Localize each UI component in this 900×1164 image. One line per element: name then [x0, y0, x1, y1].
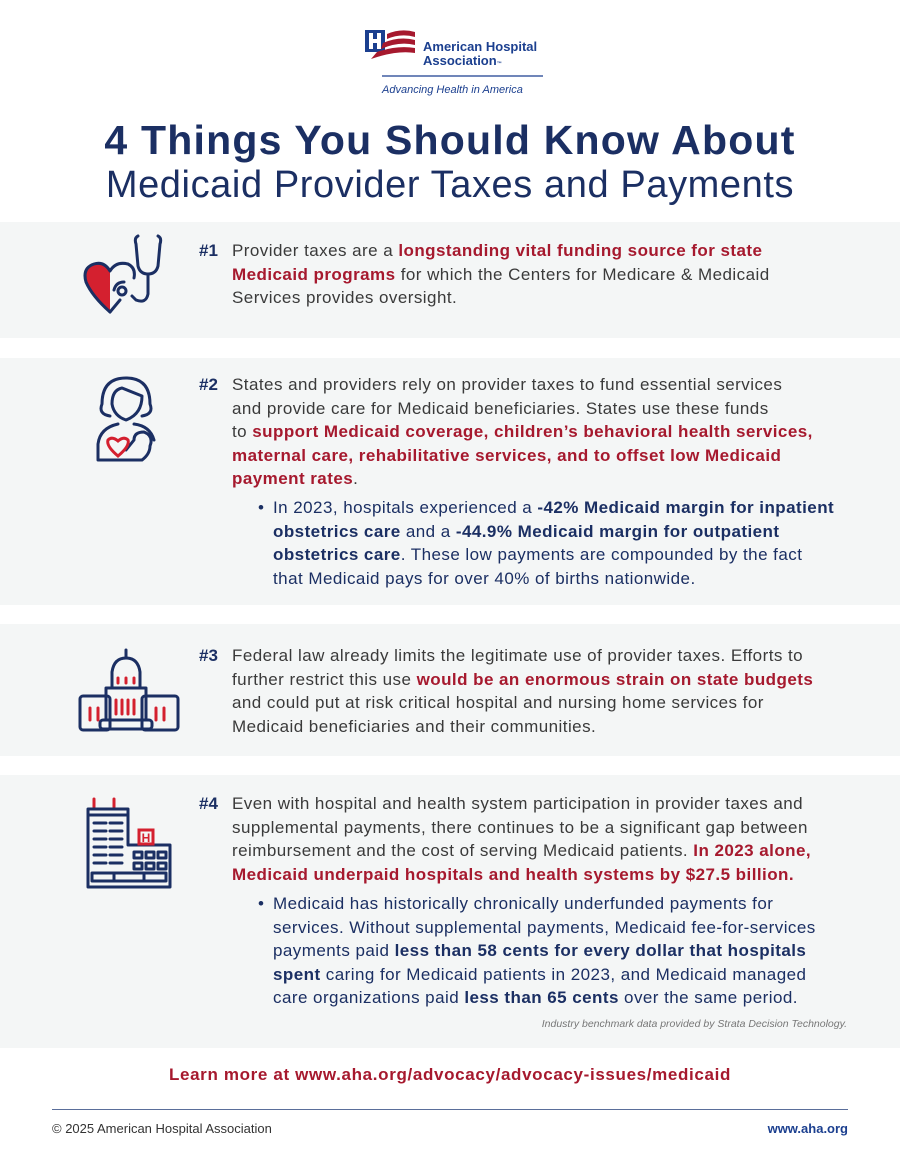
text #2: [199, 375, 813, 488]
panel: #1: Medicaid programs for which the Centers for Medicare & Medicaid: [232, 264, 770, 284]
panel: #3: Federal law already limits the legitimate use of provider taxes. Efforts to: [232, 646, 803, 665]
text #4: [199, 794, 811, 884]
panel: #3: #3: [199, 646, 218, 665]
icon: heart stethoscope: [84, 234, 162, 314]
footer: © 2025 American Hospital Association: [52, 1121, 272, 1136]
icon: capitol: [78, 648, 180, 732]
text #3: [199, 646, 813, 736]
panel: #2: [0, 358, 900, 605]
bullet #2: [258, 498, 834, 588]
logo: Association™: [423, 53, 502, 68]
panel: #4: Even with hospital and health system participation in provider taxes and: [232, 794, 803, 813]
panel: #3: Medicaid beneficiaries and their communities.: [232, 716, 596, 736]
bullet #4: Medicaid has historically chronically underfunded payments for: [273, 894, 773, 913]
panel: #3: and could put at risk critical hospital and nursing home services for: [232, 693, 764, 712]
icon: mother: [96, 376, 156, 462]
panel: #2: and provide care for Medicaid beneficiaries. States use these funds: [232, 398, 769, 418]
title: [104, 117, 796, 206]
icon: hospital: H: [142, 831, 150, 845]
panel: #4: Medicaid underpaid hospitals and health systems by $27.5 billion.: [232, 864, 794, 884]
icon: hospital: [86, 798, 172, 888]
learn more link: Learn more at www.aha.org/advocacy/advocacy-issues/medicaid: [169, 1065, 731, 1084]
title: 4 Things You Should Know About: [104, 117, 796, 163]
panel: #2: States and providers rely on provider taxes to fund essential services: [232, 375, 782, 394]
bullet #4: services. Without supplemental payments, Medicaid fee-for-services: [273, 918, 816, 936]
logo: [365, 30, 543, 96]
bullet #4: care organizations paid less than 65 cents over the same period.: [273, 988, 798, 1007]
bullet #2: that Medicaid pays for over 40% of births nationwide.: [273, 568, 696, 588]
panel: #1: #1: [199, 241, 218, 260]
source note: Industry benchmark data provided by Strata Decision Technology.: [542, 1018, 847, 1030]
panel: #2: to support Medicaid coverage, children’s behavioral health services,: [232, 422, 813, 441]
text #1: [199, 241, 770, 307]
panel: #4: supplemental payments, there continues to be a significant gap between: [232, 818, 808, 836]
bullet #2: •: [258, 498, 264, 517]
bullet #4: spent caring for Medicaid patients in 2023, and Medicaid managed: [273, 964, 806, 984]
bullet #2: In 2023, hospitals experienced a -42% Medicaid margin for inpatient: [273, 498, 834, 517]
panel: #4: reimbursement and the cost of serving Medicaid patients. In 2023 alone,: [232, 841, 811, 860]
logo: American Hospital: [423, 39, 537, 54]
bullet #4: [258, 894, 816, 1007]
panel: #4: #4: [199, 794, 218, 813]
panel: #2: payment rates.: [232, 469, 358, 488]
panel: #1: [0, 222, 900, 338]
panel: #3: [0, 624, 900, 756]
panel: #2: #2: [199, 375, 218, 394]
bullet #2: obstetrics care and a -44.9% Medicaid margin for outpatient: [273, 522, 779, 540]
panel: #1: Services provides oversight.: [232, 288, 457, 307]
panel: #3: further restrict this use would be an enormous strain on state budgets: [232, 670, 813, 688]
bullet #4: •: [258, 894, 264, 913]
bullet #4: payments paid less than 58 cents for every dollar that hospitals: [273, 941, 806, 960]
bullet #2: obstetrics care. These low payments are compounded by the fact: [273, 545, 802, 564]
panel: #1: Provider taxes are a longstanding vital funding source for state: [232, 241, 762, 260]
footer: [52, 1109, 848, 1139]
panel: #2: maternal care, rehabilitative services, and to offset low Medicaid: [232, 446, 781, 464]
title: Medicaid Provider Taxes and Payments: [106, 164, 794, 206]
footer: www.aha.org: [768, 1121, 848, 1136]
panel: #4: [0, 775, 900, 1048]
logo: Advancing Health in America: [381, 84, 523, 96]
